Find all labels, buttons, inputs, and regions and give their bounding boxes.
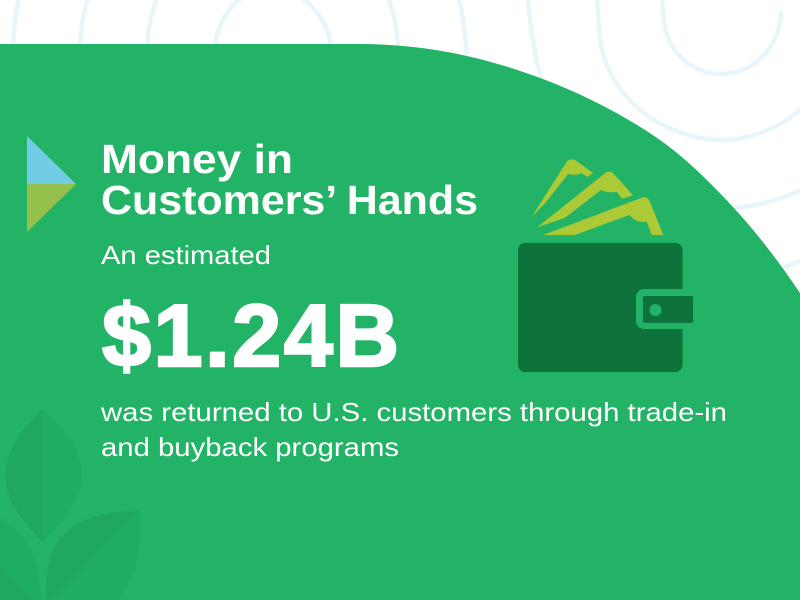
leaves decoration	[0, 409, 140, 600]
description text: and buyback programs	[101, 432, 399, 462]
description text: was returned to U.S. customers through trade-in	[100, 397, 727, 427]
title: Money in	[101, 136, 293, 182]
description text	[100, 397, 727, 462]
icon: wallet with money	[518, 159, 696, 372]
big number: $1.24B	[102, 286, 399, 385]
intro text: An estimated	[101, 240, 271, 270]
logo triangle	[27, 136, 76, 232]
title: Customers’ Hands	[101, 177, 478, 223]
title	[101, 136, 478, 223]
